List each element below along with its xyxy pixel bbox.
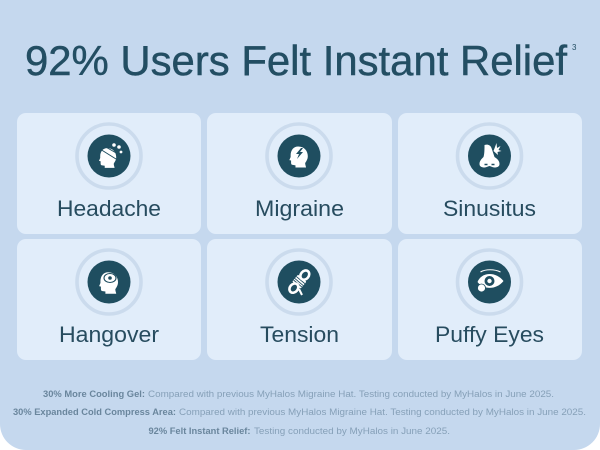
icon: migraine: [267, 124, 331, 188]
panel: tension: [207, 239, 392, 360]
label: headache: Headache: [57, 196, 161, 221]
footnote: instant relief: [148, 426, 450, 437]
panel: puffy eyes: [398, 239, 582, 360]
footnote: compress area: Compared with previous MyHalos Migraine Hat. Testing conducted by MyHalos in June 2025.: [179, 407, 586, 418]
icon: sinusitus: [458, 124, 522, 188]
footnote: compress area: [13, 407, 586, 418]
footnote: cooling gel: Compared with previous MyHalos Migraine Hat. Testing conducted by MyHalos in June 2025.: [148, 389, 554, 400]
panel: migraine: [207, 113, 392, 234]
icon: hangover: [77, 250, 141, 314]
title: 92% Users Felt Instant Relief: [25, 37, 567, 84]
footnote: compress area: 30% Expanded Cold Compress Area:: [13, 407, 176, 418]
label: puffy eyes: Puffy Eyes: [435, 322, 544, 347]
label: hangover: Hangover: [59, 322, 159, 347]
label: tension: Tension: [260, 322, 339, 347]
panel: sinusitus: [398, 113, 582, 234]
footnote: instant relief: 92% Felt Instant Relief:: [148, 426, 250, 437]
panel: headache: [17, 113, 201, 234]
panel: hangover: [17, 239, 201, 360]
icon: puffy eyes: [458, 250, 522, 314]
title: 3: [572, 43, 577, 52]
icon: tension: [267, 250, 331, 314]
footnotes: [13, 389, 586, 437]
label: migraine: Migraine: [255, 196, 344, 221]
footnote: instant relief: Testing conducted by MyHalos in June 2025.: [254, 426, 450, 437]
label: sinusitus: Sinusitus: [443, 196, 536, 221]
icon: headache: [77, 124, 141, 188]
footnote: cooling gel: 30% More Cooling Gel:: [43, 389, 145, 400]
